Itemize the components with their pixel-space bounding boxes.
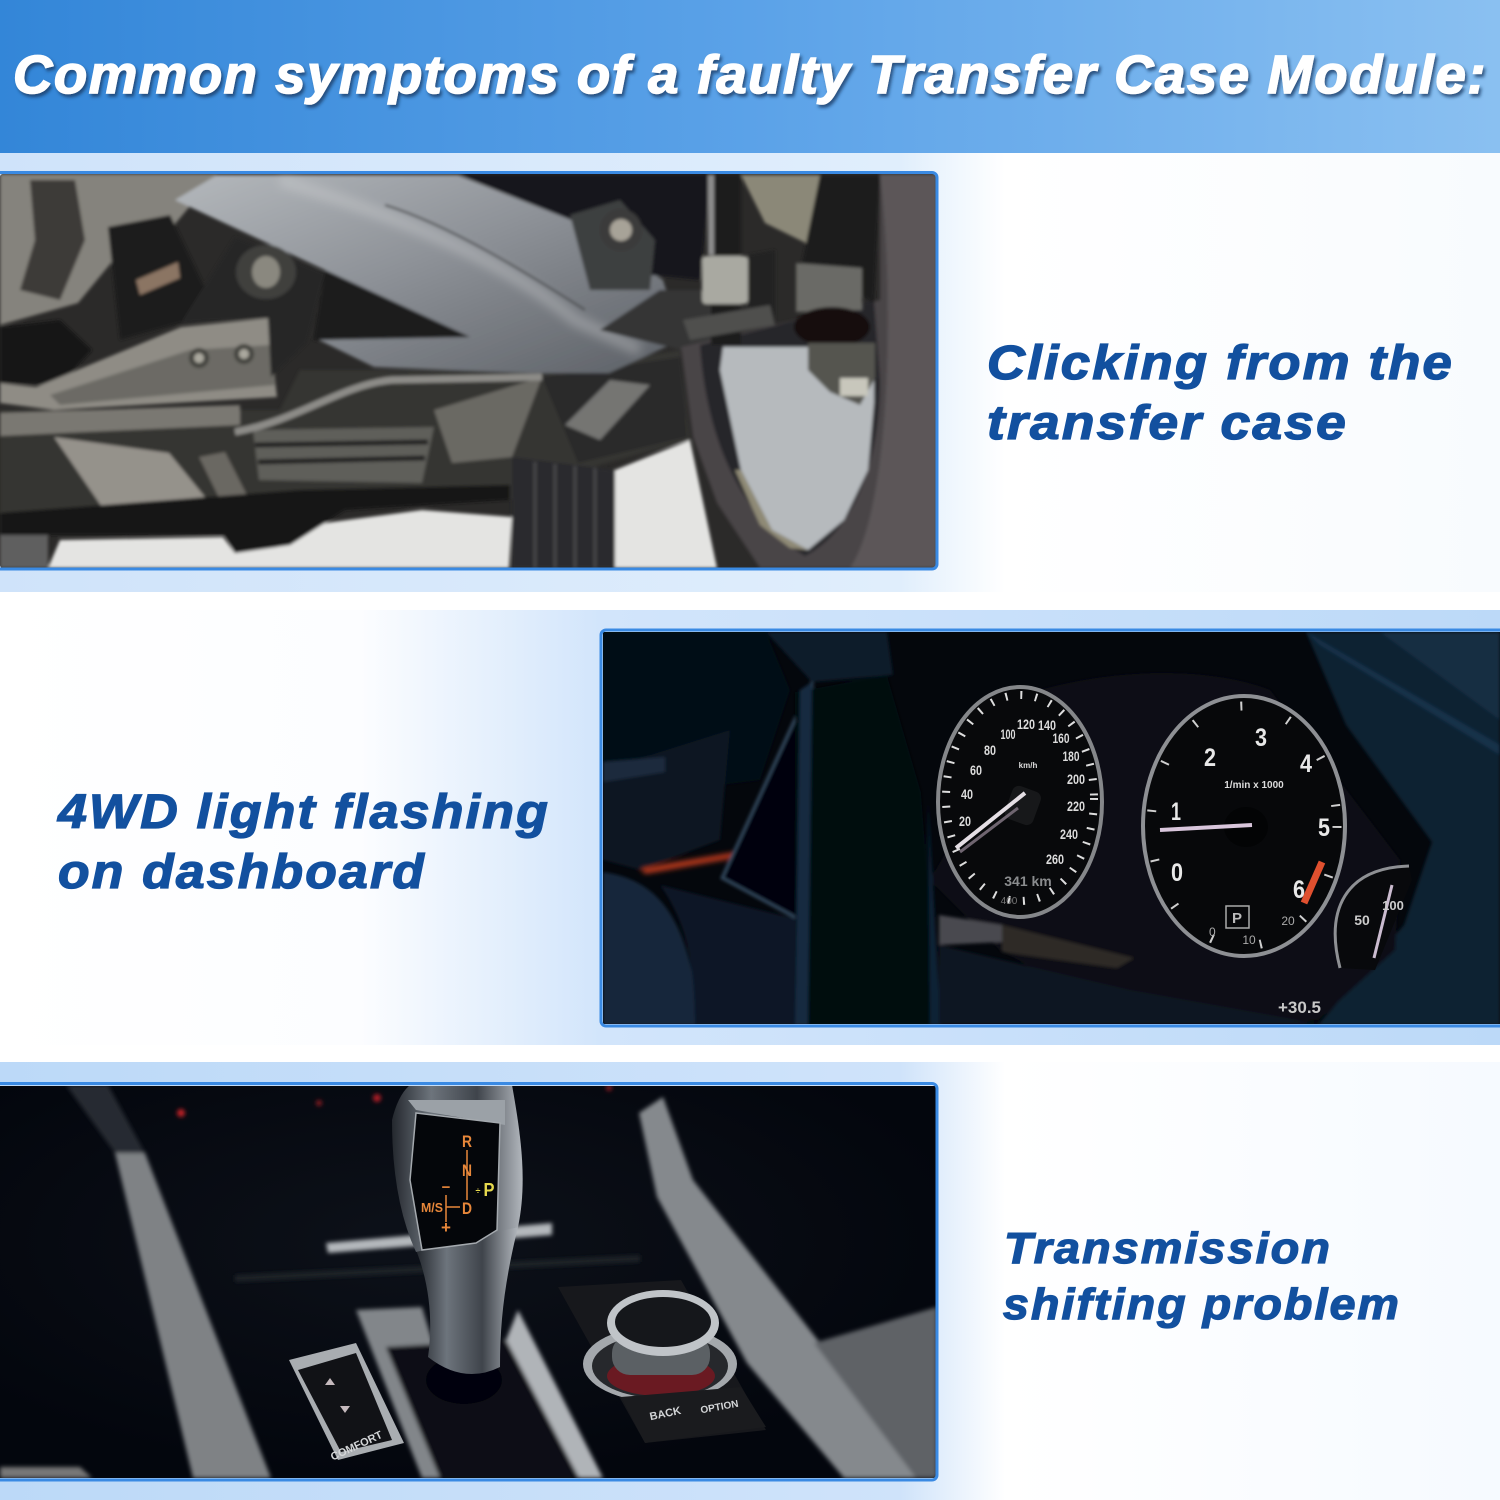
speedometer: 240 [1060, 826, 1078, 842]
comfort switch: COMFORT [329, 1429, 385, 1463]
iDrive controller: OPTION [700, 1399, 739, 1416]
gear knob: D [462, 1199, 472, 1218]
speedometer: 140 [1038, 717, 1056, 733]
comfort switch [289, 1343, 404, 1463]
speedometer: 160 [1052, 730, 1070, 746]
text: symptom two: 4WD light flashing [57, 786, 550, 839]
text: symptom three [1003, 1224, 1401, 1329]
speedometer: 60 [970, 762, 982, 778]
tachometer: 4 [1300, 750, 1312, 778]
background white [48, 510, 512, 568]
speedometer: 180 [1062, 748, 1080, 764]
speedometer: 20 [959, 813, 971, 829]
tachometer: 5 [1318, 814, 1330, 842]
wheel rim [720, 347, 874, 550]
lower dash strips [939, 915, 1002, 945]
outside temperature readout: +30.5 [1278, 998, 1321, 1017]
upper right dark [458, 174, 711, 280]
section background: row two [0, 610, 1500, 1045]
text: symptom two: on dashboard [58, 846, 426, 899]
tachometer: 20 [1281, 914, 1295, 928]
gear knob: M/S [421, 1200, 443, 1215]
tachometer: 10 [1242, 933, 1256, 947]
shifter surround [356, 1307, 440, 1478]
rear tyre [512, 457, 615, 568]
small temperature gauge: 100 [1382, 898, 1404, 913]
knuckle [711, 174, 741, 345]
iDrive controller [558, 1280, 766, 1443]
speedometer: 260 [1046, 851, 1064, 867]
tachometer: 1 [1171, 798, 1181, 826]
text: symptom two [57, 786, 550, 899]
tachometer [1143, 696, 1345, 956]
gear knob: + [441, 1218, 451, 1237]
seat and lower dash [603, 872, 700, 1025]
main control arm [175, 175, 681, 373]
photo panel: gear shifter console [0, 1085, 937, 1478]
section background: row one [0, 153, 1500, 592]
gear knob: N [462, 1161, 472, 1180]
photo panel: instrument cluster [603, 632, 1500, 1025]
photo frame: gear shifter console [0, 1084, 937, 1480]
photo frame: instrument cluster [601, 630, 1500, 1026]
right door trim [1306, 632, 1500, 1025]
cluster hood [930, 673, 1400, 1020]
speedometer: 220 [1067, 798, 1085, 814]
tie-rod end [702, 256, 748, 304]
crossbar [0, 485, 510, 553]
title: Common symptoms of a faulty Transfer Case Module: [13, 45, 1487, 105]
text: symptom one: Clicking from the [987, 337, 1454, 390]
speedometer: 40 [961, 786, 973, 802]
tachometer: 3 [1255, 724, 1267, 752]
tachometer: 6 [1293, 876, 1305, 904]
text: symptom three: shifting problem [1003, 1280, 1401, 1329]
gear knob: − [442, 1179, 451, 1196]
header banner [0, 0, 1500, 153]
tachometer: 2 [1204, 744, 1216, 772]
console trim strips [66, 1085, 145, 1153]
engine bay left [0, 174, 217, 325]
steering wheel [766, 632, 893, 682]
text: symptom three: Transmission [1004, 1224, 1332, 1273]
speedometer: 120 [1017, 716, 1035, 732]
pocket and dark bracket [314, 270, 466, 341]
tachometer: 0 [1171, 859, 1183, 887]
tyre [680, 182, 889, 568]
gear knob: P [484, 1180, 494, 1200]
gear knob: ÷ [476, 1186, 481, 1196]
speedometer: km/h [1019, 761, 1037, 770]
photo panel: vehicle undercarriage [0, 174, 937, 568]
tachometer: P [1232, 910, 1242, 927]
speedometer: 200 [1067, 771, 1085, 787]
text: symptom one [987, 337, 1454, 450]
speedometer [938, 687, 1102, 917]
section background: row three [0, 1062, 1500, 1500]
photo frame: undercarriage [0, 172, 937, 569]
red indicator lights [177, 1109, 185, 1117]
under floor [0, 350, 690, 515]
speedometer: 100 [1000, 726, 1016, 742]
gear knob: R [462, 1132, 472, 1151]
speedometer: 80 [984, 742, 996, 758]
tachometer: 1/min x 1000 [1224, 780, 1284, 791]
tachometer: 0 [1209, 925, 1216, 939]
small temperature gauge: 50 [1354, 912, 1370, 928]
gear knob [392, 1085, 523, 1374]
speedometer: 400 [1001, 896, 1018, 907]
small temperature gauge [1335, 866, 1412, 970]
speedometer: 341 km [1004, 873, 1052, 889]
text: symptom one: transfer case [987, 397, 1348, 450]
bolts [632, 212, 641, 222]
iDrive controller: BACK [649, 1405, 682, 1423]
